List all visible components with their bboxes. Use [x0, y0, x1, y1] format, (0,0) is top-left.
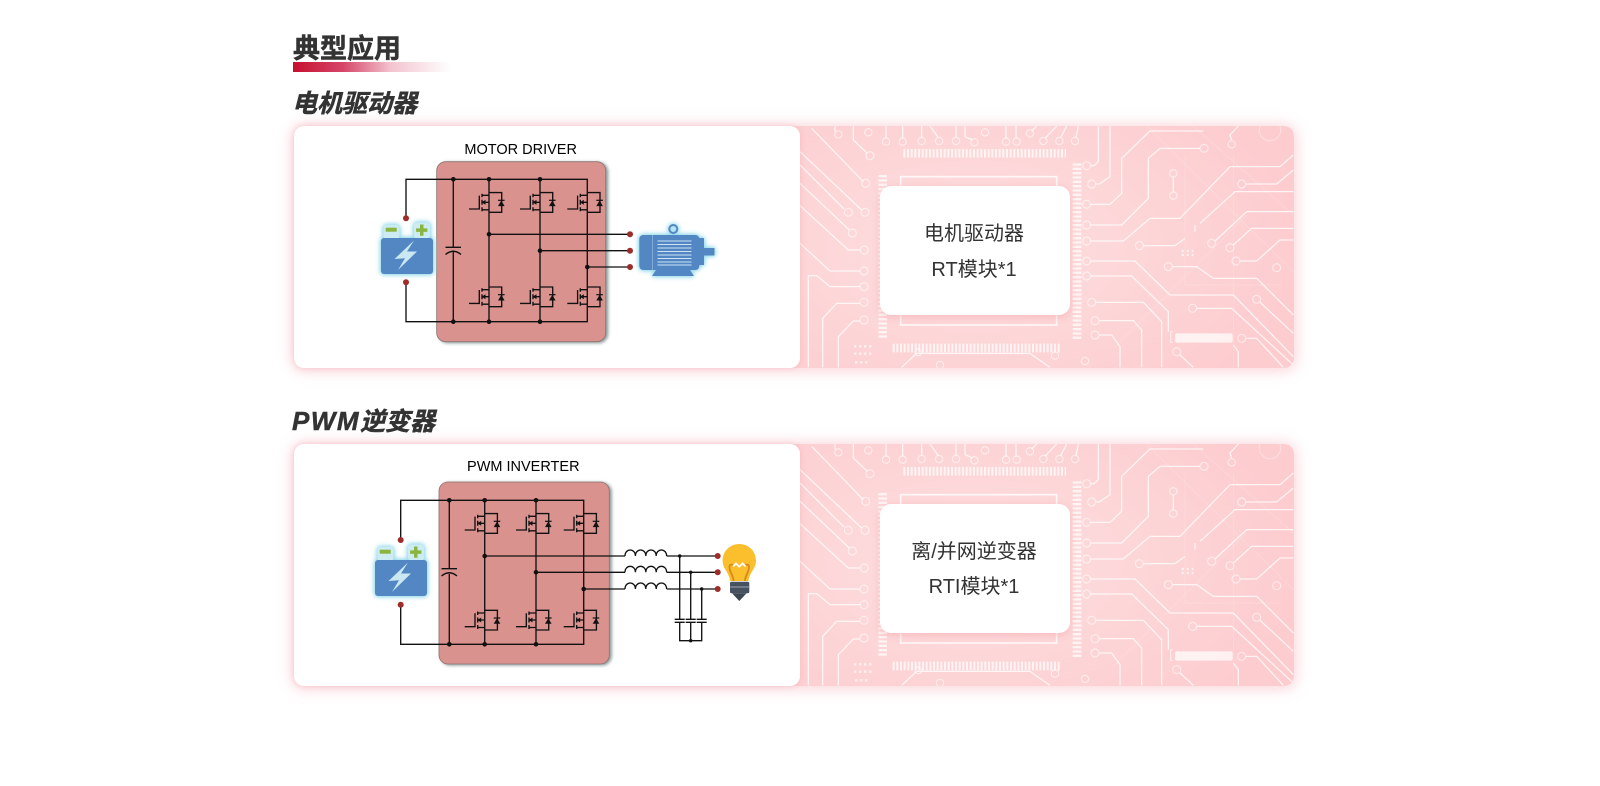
panel: PWM inverter pcb background [294, 444, 1294, 686]
chart: PWM inverter circuit diagram [370, 459, 756, 668]
icon: motor [639, 225, 714, 276]
callout: PWM inverter module: 离/并网逆变器 [911, 541, 1037, 563]
panel: motor driver section [294, 126, 1294, 368]
heading: motor driver: 电机驱动器 [292, 90, 417, 118]
chart: motor driver circuit diagram [376, 142, 718, 346]
callout: PWM inverter module: RTI模块*1 [929, 576, 1019, 598]
icon: battery [381, 222, 433, 274]
panel: PWM inverter diagram card [294, 444, 800, 686]
chart: PWM inverter circuit diagram: PWM INVERTER [467, 459, 580, 475]
callout: PWM inverter module [880, 504, 1070, 633]
callout: motor driver module: RT模块*1 [931, 259, 1017, 281]
callout: motor driver module [880, 186, 1070, 315]
chart: motor driver circuit diagram: MOTOR DRIVER [464, 142, 577, 158]
icon: light bulb [723, 544, 756, 601]
icon: battery [375, 544, 427, 596]
title: 典型应用 [293, 34, 401, 64]
heading: PWM inverter: PWM逆变器 [292, 406, 435, 436]
callout: motor driver module: 电机驱动器 [924, 223, 1024, 245]
title underline gradient bar [293, 62, 451, 72]
panel: motor driver diagram card [294, 126, 800, 368]
panel: PWM inverter section [294, 444, 1294, 686]
panel: motor driver pcb background [294, 126, 1294, 368]
